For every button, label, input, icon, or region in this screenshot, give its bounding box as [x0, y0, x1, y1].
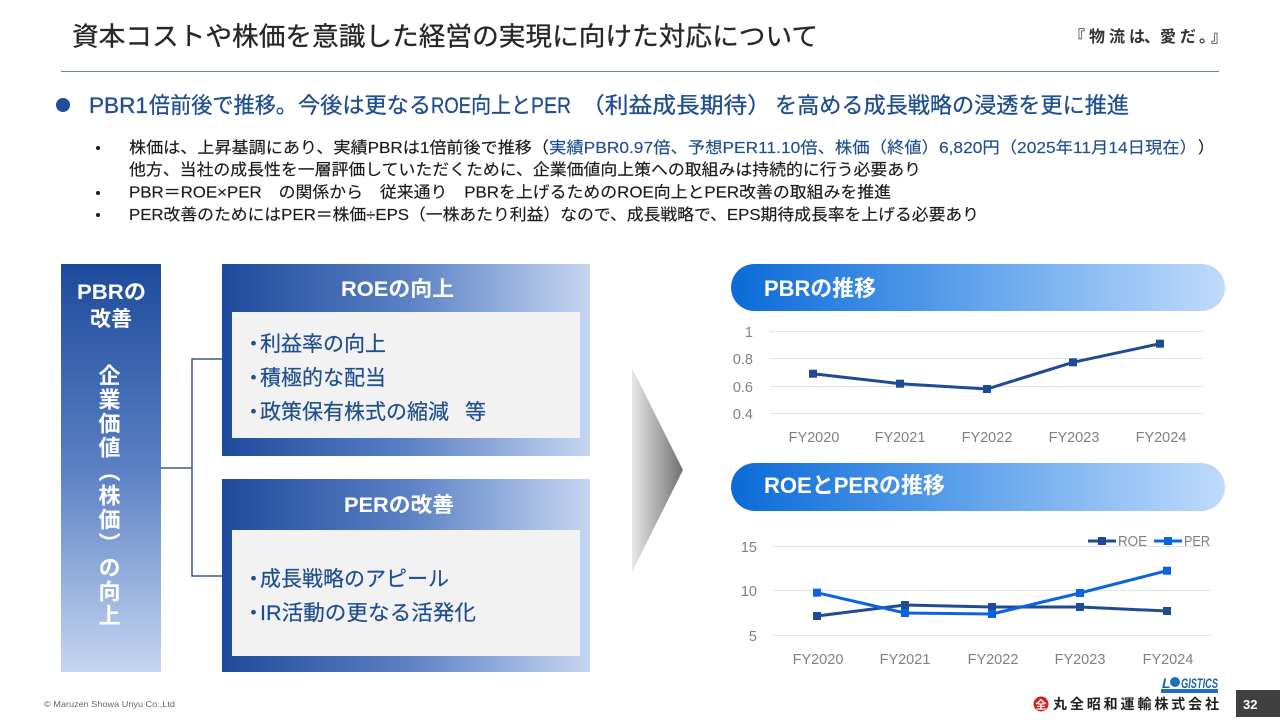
- PER items: [243, 568, 476, 625]
- headline text: [89, 93, 1129, 118]
- tagline: 』: [1211, 29, 1227, 46]
- PER items: ・: [243, 602, 264, 625]
- tagline: [1069, 28, 1227, 46]
- bullet 1: [96, 139, 1214, 179]
- ROE items: 政策保有株式の縮減: [260, 401, 449, 424]
- headline text: 倍前後で推移。: [149, 93, 297, 118]
- logo: Logistics mark: [1161, 675, 1218, 693]
- chart: ROE and PER line chart: FY2024: [1143, 652, 1193, 668]
- icon: company emblem: 全: [1036, 698, 1046, 712]
- tagline: 愛だ: [1160, 28, 1200, 46]
- heading: PBR trend: [731, 264, 1225, 311]
- chart: PBR line chart: FY2022: [962, 430, 1012, 446]
- tagline: 『物流は: [1069, 28, 1149, 46]
- ROE items: 利益率の向上: [260, 333, 386, 356]
- chart: PBR line chart: FY2023: [1049, 430, 1099, 446]
- headline message: [56, 93, 1129, 118]
- panel: PER improvement: [222, 479, 590, 672]
- chart: PBR line chart: [733, 325, 1203, 446]
- headline text: 向上と: [471, 93, 531, 118]
- column heading: PBRの: [77, 281, 146, 304]
- ROE series: [813, 601, 1171, 620]
- bullet list: [96, 139, 1214, 224]
- heading: ROE and PER trend: [731, 463, 1225, 511]
- chart: PBR line chart: 0.8: [733, 352, 753, 368]
- title: 資本コストや株価を意識した経営の実現に向けた対応について: [72, 22, 818, 52]
- chart: ROE and PER line chart: [741, 534, 1211, 668]
- bullet 3: PER改善のためにはPER＝株価÷EPS（一株あたり利益）なので、成長戦略で、EPS期待成長率を上げる必要あり: [129, 206, 979, 224]
- headline text: PER: [531, 93, 571, 118]
- chart: ROE and PER line chart: FY2022: [968, 652, 1018, 668]
- logo: Logistics mark: GISTICS: [1181, 675, 1218, 691]
- headline text: （利益成長期待）: [581, 93, 771, 118]
- PER series: [813, 567, 1171, 618]
- column subheading: 改善: [90, 308, 132, 331]
- ROE items: ・: [243, 367, 264, 390]
- copyright: © Maruzen Showa Unyu Co.,Ltd: [44, 699, 175, 709]
- heading: PBR trend: PBRの推移: [764, 276, 876, 301]
- chart: ROE and PER line chart: FY2021: [880, 652, 930, 668]
- headline text: ROE: [431, 93, 471, 118]
- headline text: 今後は更なる: [298, 93, 431, 118]
- panel: ROE improvement: [222, 264, 590, 456]
- page number: 32: [1243, 697, 1257, 712]
- chart: ROE and PER line chart: FY2023: [1055, 652, 1105, 668]
- ROE items: 積極的な配当: [260, 367, 386, 390]
- ROE items: ・: [243, 333, 264, 356]
- bullet 1: 株価は、上昇基調にあり、実績PBRは1倍前後で推移（: [129, 139, 549, 157]
- icon: company emblem: [1034, 696, 1048, 712]
- chart: PBR line chart: 0.4: [733, 407, 753, 423]
- chart: ROE and PER line chart: FY2020: [793, 652, 843, 668]
- headline text: PBR1: [89, 93, 148, 118]
- chart: ROE and PER line chart: 10: [741, 584, 757, 600]
- tagline: 。: [1199, 29, 1215, 46]
- vertical label: 企業価値（株価）の向上: [96, 364, 120, 628]
- ROE items: 等: [465, 401, 486, 424]
- legend: [1088, 534, 1210, 550]
- PER heading: PERの改善: [344, 494, 454, 517]
- icon: headline bullet: [56, 98, 70, 112]
- ROE items: [243, 333, 486, 424]
- panel: PBR improvement column: [61, 264, 161, 672]
- PER items: ・: [243, 568, 264, 591]
- bullet 2: PBR＝ROE×PER の関係から 従来通り PBRを上げるためのROE向上とPER改善の取組みを推進: [129, 184, 891, 202]
- PER items: 成長戦略のアピール: [260, 568, 449, 591]
- chart: PBR line chart: FY2024: [1136, 430, 1186, 446]
- tagline: 、: [1144, 29, 1160, 46]
- arrow: [632, 368, 683, 572]
- ROE heading: ROEの向上: [341, 278, 454, 301]
- headline text: を高める成長戦略の浸透を更に推進: [775, 93, 1129, 118]
- ROE items: ・: [243, 401, 264, 424]
- bullet 1: ）: [1198, 139, 1214, 157]
- chart: ROE and PER line chart: 5: [749, 629, 757, 645]
- connector lines: [161, 359, 222, 576]
- chart: PBR line chart: FY2021: [875, 430, 925, 446]
- legend: ROE: [1118, 534, 1147, 550]
- chart: PBR line chart: 0.6: [733, 380, 753, 396]
- chart: PBR line chart: 1: [745, 325, 753, 341]
- logo: Logistics mark: L: [1162, 675, 1171, 691]
- PER items: IR活動の更なる活発化: [260, 602, 476, 625]
- logo: company name: 丸全昭和運輸株式会社: [1053, 696, 1219, 712]
- page number: [1236, 690, 1280, 717]
- heading: ROE and PER trend: ROEとPERの推移: [764, 473, 945, 498]
- bullet 1: 実績PBR0.97倍、予想PER11.10倍、株価（終値）6,820円（2025年11月14日現在）: [549, 139, 1197, 157]
- legend: PER: [1184, 534, 1210, 550]
- chart: ROE and PER line chart: 15: [741, 540, 757, 556]
- bullet 1: 他方、当社の成長性を一層評価していただくために、企業価値向上策への取組みは持続的に行う必要あり: [129, 161, 921, 179]
- chart: PBR line chart: FY2020: [789, 430, 839, 446]
